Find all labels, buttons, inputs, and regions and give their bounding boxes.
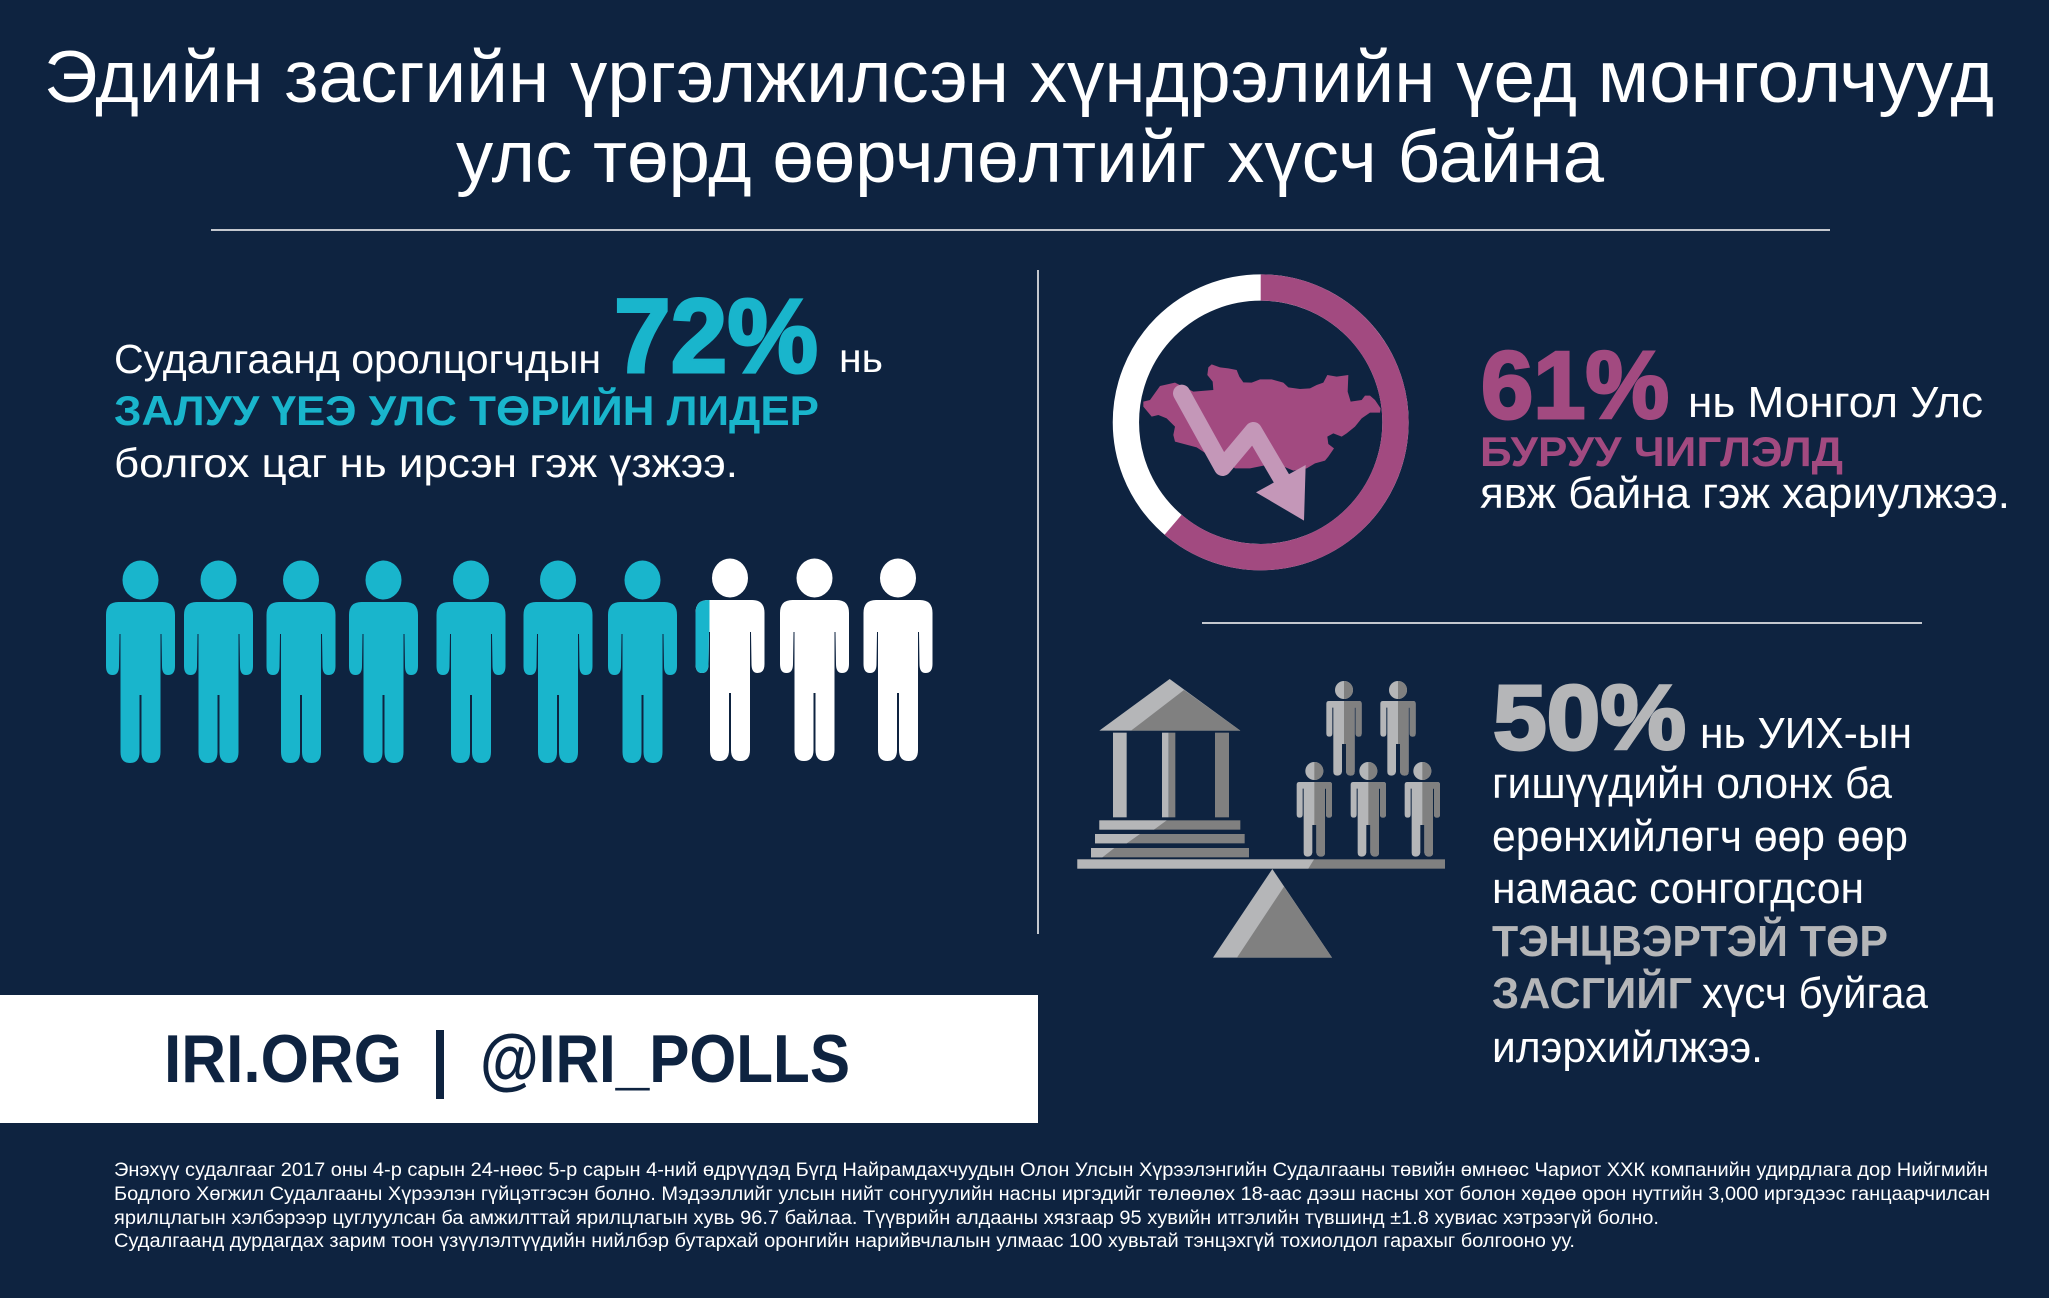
panel: 50 percent statement: 50% — [1493, 667, 1686, 769]
panel: 61 percent statement — [1480, 332, 2010, 518]
panel: 72 percent statement: Судалгаанд оролцогчдын — [114, 336, 601, 382]
panel: 72 percent statement: 72% — [614, 278, 818, 395]
footnote: methodology: Бодлого Хөгжил Судалгааны Хүрээлэн гүйцэтгэсэн болно. Мэдээллийг улсын нийт сонгуулийн насны иргэдийг төлөөлөх 18-аас дээш насны хот болон хөдөө орон нутгийн 3,000 иргэдээс ганцаарчилсан — [114, 1184, 1990, 1205]
panel: 50 percent statement: ЗАСГИЙГ — [1492, 967, 1692, 1018]
icon row: ten people, 72 percent teal — [106, 558, 932, 763]
panel: 61 percent statement: БУРУУ ЧИГЛЭЛД — [1480, 428, 1843, 475]
panel: 61 percent statement: нь Монгол Улс — [1688, 378, 1983, 427]
banner: IRI links: @IRI_POLLS — [480, 1021, 850, 1097]
title — [44, 37, 1994, 198]
panel: 50 percent statement — [1492, 667, 1928, 1072]
panel: 50 percent statement: илэрхийлжээ. — [1492, 1023, 1763, 1072]
footnote: methodology — [114, 1160, 1990, 1252]
banner: IRI links: IRI.ORG — [164, 1021, 402, 1097]
panel: 72 percent statement: нь — [839, 335, 883, 381]
icon: balance with government building and people — [1077, 679, 1445, 958]
panel: 50 percent statement: ерөнхийлөгч өөр өөр — [1492, 812, 1908, 861]
title: Эдийн засгийн үргэлжилсэн хүндрэлийн үед монголчууд — [44, 37, 1994, 118]
title: улс төрд өөрчлөлтийг хүсч байна — [456, 117, 1604, 198]
panel: 61 percent statement: 61% — [1481, 332, 1669, 439]
panel: 50 percent statement: нь УИХ-ын — [1700, 709, 1912, 758]
panel: 50 percent statement: хүсч буйгаа — [1702, 969, 1928, 1018]
footnote: methodology: Энэхүү судалгааг 2017 оны 4-р сарын 24-нөөс 5-р сарын 4-ний өдрүүдэд Бүгд Найрамдахчуудын Олон Улсын Хүрээлэнгийн Судалгааны төвийн өмнөөс Чариот ХХК компанийн удирдлага дор Нийгмийн — [114, 1160, 1988, 1181]
panel: 50 percent statement: ТЭНЦВЭРТЭЙ ТӨР — [1492, 915, 1888, 966]
panel: 72 percent statement: ЗАЛУУ ҮЕЭ УЛС ТӨРИЙН ЛИДЕР — [114, 386, 819, 434]
panel: 50 percent statement: гишүүдийн олонх ба — [1492, 759, 1893, 808]
icon: ring with Mongolia map and falling arrow — [1126, 288, 1395, 557]
panel: 72 percent statement — [114, 278, 883, 486]
banner: IRI links — [0, 995, 1038, 1123]
footnote: methodology: Судалгаанд дурдагдах зарим тоон үзүүлэлтүүдийн нийлбэр бутархай оронгийн нарийвчлалын улмаас 100 хувьтай тэнцэхгүй тохиолдол гарахыг болгооно уу. — [114, 1231, 1575, 1252]
footnote: methodology: ярилцлагын хэлбэрээр цуглуулсан ба амжилттай ярилцлагын хувь 96.7 байлаа. Түүврийн алдааны хязгаар 95 хувийн итгэлийн түвшинд ±1.8 хувиас хэтрээгүй болно. — [114, 1208, 1659, 1229]
panel: 61 percent statement: явж байна гэж хариулжээ. — [1480, 469, 2010, 518]
panel: 50 percent statement: намаас сонгогдсон — [1492, 864, 1864, 913]
panel: 72 percent statement: болгох цаг нь ирсэн гэж үзжээ. — [114, 440, 738, 486]
